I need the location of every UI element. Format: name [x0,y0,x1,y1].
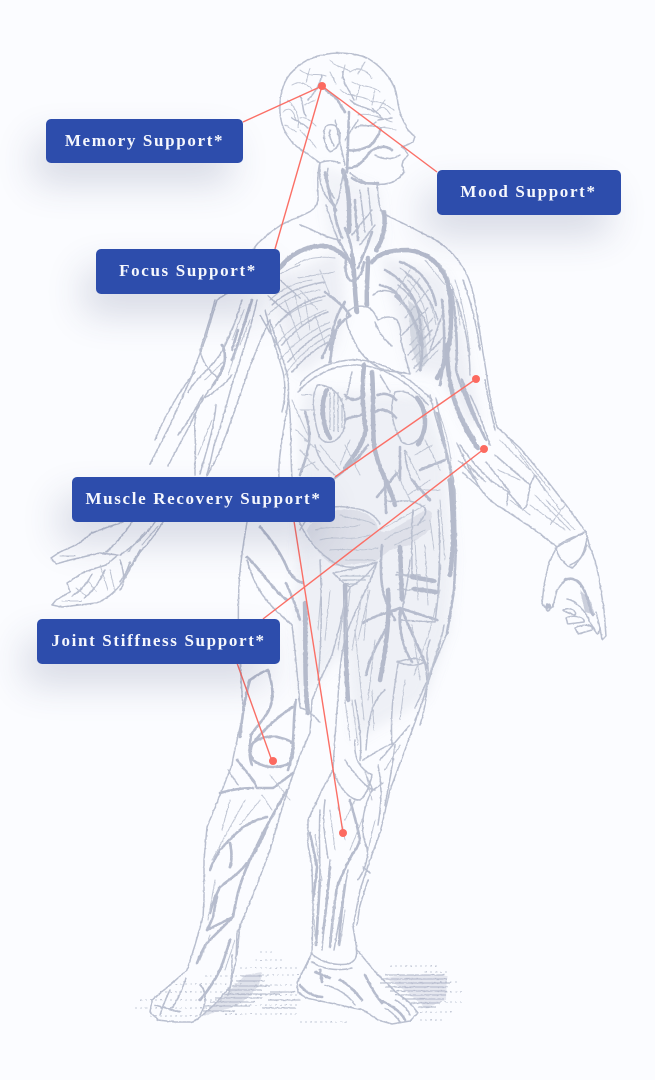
label: Memory Support [46,118,243,163]
callout line: mood [322,86,437,172]
label: Muscle Recovery Support [72,477,335,522]
marker dot: elbow [480,445,488,453]
right forearm and hand details [453,380,595,634]
callout line: focus [275,86,322,249]
label: Mood Support: Mood Support* [460,182,597,201]
marker dot: head [318,82,326,90]
callout line: muscle recovery to calf [294,521,343,833]
label: Muscle Recovery Support: Muscle Recovery Support* [85,489,322,508]
callout line: muscle recovery to upper arm [335,379,476,477]
label: Joint Stiffness Support: Joint Stiffness Support* [51,631,266,650]
neck arteries [300,165,385,250]
label: Mood Support [436,170,620,214]
head and brain veins [283,60,400,183]
marker dot: calf [339,829,347,837]
anatomical figure: circulatory system [51,53,606,1024]
pelvis, thigh muscles and vessels [247,480,453,770]
body outline [51,53,606,1024]
chest: arches, trunk and ribs [265,228,480,448]
label: Joint Stiffness Support [37,619,280,664]
diaphragm, kidneys and abdominal vessels [288,360,452,513]
soft tonal shading of dense regions [275,165,480,740]
ground shadow [135,952,462,1022]
label: Focus Support [96,249,280,294]
label: Focus Support: Focus Support* [119,261,257,280]
marker dot: knee [269,757,277,765]
right lower leg and foot veins [300,740,410,1022]
label: Memory Support: Memory Support* [65,130,224,150]
marker dot: upper arm [472,375,480,383]
left knee and lower leg veins [155,670,296,1015]
callout line: joint stiffness to elbow [263,449,484,619]
callout line: memory [243,86,322,122]
left arm veins [60,300,285,601]
callout line: joint stiffness to knee [237,663,272,761]
